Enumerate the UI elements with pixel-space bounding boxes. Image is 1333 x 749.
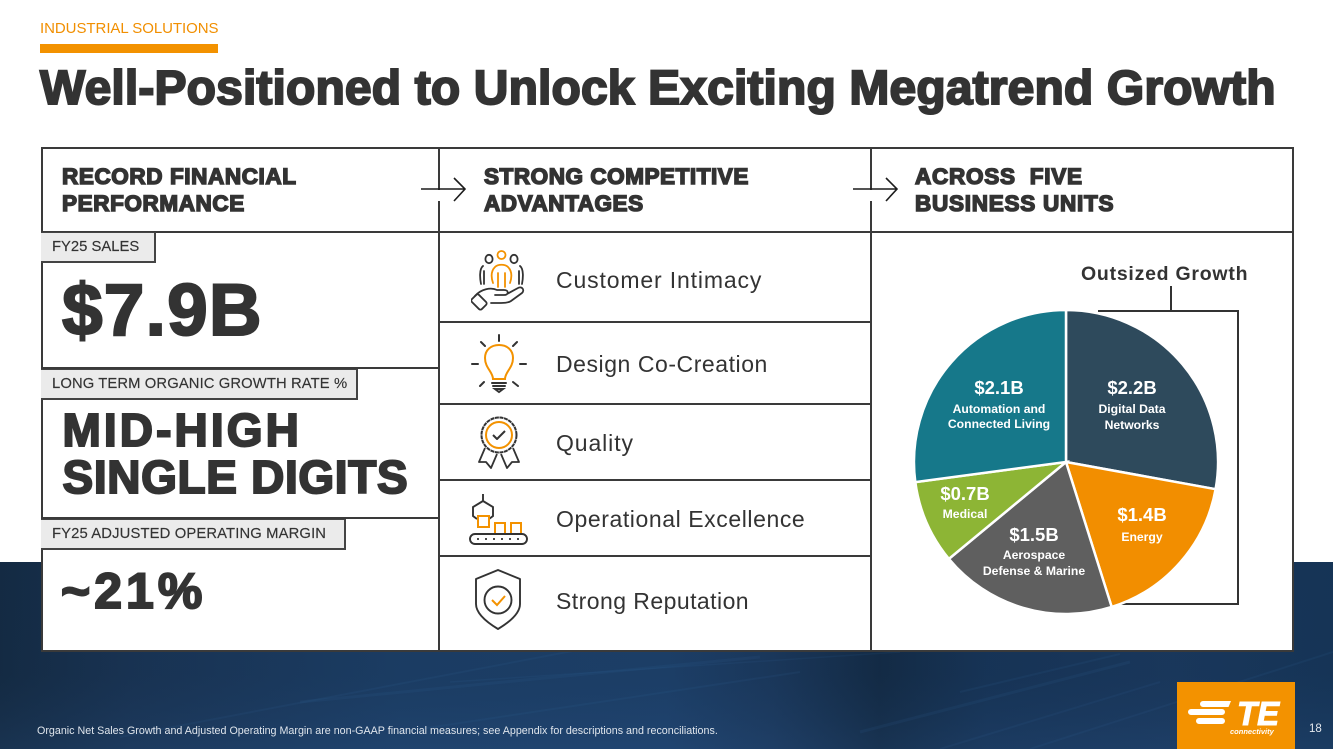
slice: medical (915, 462, 1066, 559)
logo: TE connectivity: TE (1237, 695, 1280, 732)
label: strong reputation: Strong Reputation (556, 588, 749, 614)
heading: record financial performance (62, 164, 297, 216)
page number: 18 (1309, 723, 1322, 735)
slice: digital data networks (1066, 310, 1218, 489)
icon: customer intimacy (471, 250, 524, 310)
title: Well-Positioned to Unlock Exciting Megatrend Growth (40, 62, 1276, 115)
arrow: advantages to business units (853, 177, 898, 202)
label: automation (948, 377, 1050, 431)
panel: main table (41, 147, 1294, 652)
slice: aerospace defense and marine (949, 462, 1112, 614)
label: customer intimacy: Customer Intimacy (556, 267, 762, 293)
tag: FY25 sales: FY25 SALES (52, 239, 139, 255)
label: automation: Automation and (953, 402, 1045, 416)
heading: across five business units: BUSINESS UNITS (915, 191, 1114, 216)
metric: sales value: $7.9B (62, 270, 263, 351)
icon: strong reputation (475, 569, 521, 630)
label: digital data networks: Networks (1105, 418, 1160, 432)
label: medical (940, 483, 990, 521)
footnote: Organic Net Sales Growth and Adjusted Operating Margin are non-GAAP financial measures; see Appendix for descriptions and reconciliations. (37, 725, 718, 737)
label: aerospace (983, 524, 1085, 578)
label: operational excellence: Operational Excellence (556, 506, 805, 532)
slice: automation and connected living (914, 310, 1066, 482)
icon: quality (478, 416, 520, 469)
label: aerospace: $1.5B (1009, 524, 1059, 545)
metric: growth rate: SINGLE DIGITS (62, 451, 408, 503)
tag: adjusted operating margin: FY25 ADJUSTED OPERATING MARGIN (52, 526, 326, 542)
metric: growth rate (62, 404, 408, 503)
heading: strong competitive advantages: STRONG COMPETITIVE (484, 164, 749, 189)
label: aerospace: Aerospace (1003, 548, 1065, 562)
slice: energy (1066, 462, 1216, 607)
icon: design co-creation (471, 334, 527, 394)
label: digital data networks: $2.2B (1107, 377, 1157, 398)
label: digital data networks (1098, 377, 1166, 432)
heading: outsized growth: Outsized Growth (1081, 263, 1248, 285)
background: dark blue band (0, 562, 1333, 749)
heading: record financial performance: RECORD FINANCIAL (62, 164, 297, 189)
label: medical: $0.7B (940, 483, 990, 504)
bracket: outsized growth (1098, 286, 1239, 605)
heading: across five business units: ACROSS FIVE (915, 164, 1083, 189)
section label underline (40, 44, 218, 53)
section label: INDUSTRIAL SOLUTIONS (40, 20, 218, 37)
label: medical: Medical (943, 507, 987, 521)
heading: across five business units (914, 164, 1114, 216)
tag: long term organic growth (41, 369, 358, 400)
metric: growth rate: MID-HIGH (62, 404, 302, 456)
heading: record financial performance: PERFORMANCE (62, 191, 245, 216)
label: digital data networks: Digital Data (1098, 402, 1166, 416)
heading: strong competitive advantages (484, 164, 749, 216)
logo: TE connectivity: connectivity (1230, 727, 1275, 736)
pie chart: sales by business unit (915, 311, 1217, 613)
metric: operating margin: ~21% (61, 563, 206, 619)
label: automation: $2.1B (974, 377, 1024, 398)
icon: operational excellence (469, 494, 528, 545)
tag: long term organic growth: LONG TERM ORGANIC GROWTH RATE % (52, 376, 347, 392)
tag: FY25 sales (41, 232, 156, 263)
tag: adjusted operating margin (41, 519, 346, 550)
label: design co-creation: Design Co-Creation (556, 351, 768, 377)
label: energy: Energy (1121, 530, 1163, 544)
arrow: financial to advantages (421, 177, 466, 202)
heading: strong competitive advantages: ADVANTAGES (484, 191, 644, 216)
label: aerospace: Defense & Marine (983, 564, 1085, 578)
label: quality: Quality (556, 430, 634, 456)
logo: TE connectivity (1177, 682, 1295, 749)
label: energy: $1.4B (1117, 504, 1167, 525)
label: automation: Connected Living (948, 417, 1050, 431)
label: energy (1117, 504, 1167, 544)
